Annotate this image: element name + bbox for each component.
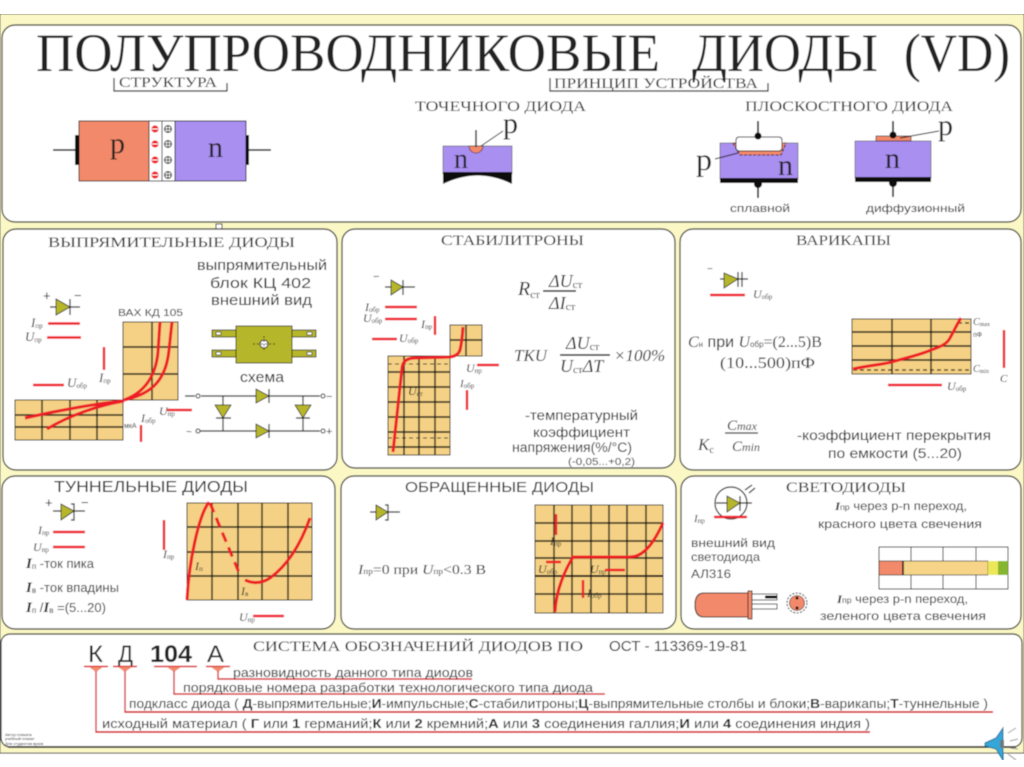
legend: forward current and voltage: I [31, 315, 35, 330]
chart: zener characteristic: ст [417, 390, 423, 398]
formula: temperature coefficient: ТКU [514, 346, 549, 365]
text: temperature coefficient description [512, 408, 638, 468]
formula: overlap coefficient: max [737, 419, 758, 433]
diagram: diffused diode: диффузионный [866, 203, 965, 215]
diagram: p-n structure: p [110, 127, 125, 160]
designation code [88, 641, 224, 668]
formula: temperature coefficient: ×100% [614, 346, 665, 365]
text: green glow [820, 592, 986, 623]
legend rows: разновидность данного типа диодов [233, 666, 473, 680]
formula: zener resistance: ΔI [549, 293, 566, 313]
legend: forward current and voltage [33, 523, 85, 554]
formula: overlap coefficient: с [709, 445, 714, 456]
icon: speaker [985, 728, 1018, 760]
legend: reverse current and voltage: пр [425, 323, 433, 331]
heading: ВЫПРЯМИТЕЛЬНЫЕ ДИОДЫ [48, 235, 295, 251]
text: overlap coefficient description: -коэффициент перекрытия [797, 428, 991, 443]
legend: forward current and voltage: пр [34, 336, 42, 344]
icon: diode symbol: + [43, 288, 51, 303]
diagram: p-n structure: n [208, 131, 223, 164]
chart: zener characteristic: U [408, 384, 417, 398]
text: peak and valley currents: п [32, 562, 36, 571]
chart: current-voltage curve KD105: U [159, 404, 168, 418]
chart: zener characteristic: пр [475, 367, 482, 375]
text: LED exterior caption [691, 536, 775, 581]
chart: backward diode characteristic: обр [547, 568, 558, 576]
heading: device principle: ПРИНЦИП УСТРОЙСТВА [554, 75, 758, 92]
connector lines [84, 666, 993, 732]
text: peak and valley currents: -ток пика [36, 556, 95, 571]
chart: tunnel diode characteristic: U [239, 610, 248, 624]
panel: zener diodes [342, 229, 675, 468]
formula: temperature coefficient: ст [590, 341, 599, 353]
formula: zener resistance: ΔU [549, 271, 573, 291]
small print: учебный плакат [5, 736, 35, 741]
diagram: diffused diode: n [885, 142, 900, 175]
icon: varicap symbol: обр [762, 293, 773, 301]
heading: СВЕТОДИОДЫ [786, 480, 906, 496]
text: red glow [818, 499, 982, 531]
chart: current-voltage curve KD105: ВАХ КД 105 [118, 308, 184, 319]
icon: LED symbol [693, 485, 755, 525]
text: peak and valley currents: / [36, 600, 44, 615]
text: rectifier block description: выпрямительный [197, 258, 327, 274]
designation code: А [207, 641, 224, 668]
legend: reverse current and voltage: I [365, 300, 369, 314]
diagram: diffused diode [855, 109, 965, 215]
text: peak and valley currents: -ток впадины [36, 580, 119, 595]
diagram: point-contact diode [415, 99, 586, 184]
legend: reverse current and voltage [363, 300, 435, 345]
chart: backward diode characteristic: I [550, 534, 554, 548]
icon: LED symbol: пр [698, 517, 705, 525]
chart: zener characteristic [388, 325, 499, 455]
diagram: point-contact diode: n [454, 144, 468, 175]
title: ДИОДЫ [692, 23, 878, 83]
chart: backward diode characteristic: U [538, 562, 547, 576]
formula: overlap coefficient: min [742, 440, 760, 454]
connector tab [216, 224, 222, 229]
panel: backward diodes [341, 476, 676, 629]
chart: backward diode characteristic [535, 505, 663, 613]
legend: forward current and voltage [25, 315, 81, 344]
formula: temperature coefficient: ΔT [582, 356, 605, 376]
chart: current-voltage curve KD105: пр [103, 377, 111, 385]
icon: varicap symbol: U [753, 287, 762, 301]
text: capacitance range: Cн при Uобр=(2...5)В [688, 334, 822, 351]
designation code: 104 [150, 641, 193, 668]
icon: tunnel diode symbol [45, 495, 89, 520]
chart: current-voltage curve KD105: обр [145, 417, 156, 425]
formula: temperature coefficient [514, 333, 665, 376]
formula: zener resistance [517, 271, 582, 313]
text: peak and valley currents: в [49, 606, 54, 615]
panel: light-emitting diodes [681, 476, 1021, 629]
diagram: p-n structure [53, 121, 271, 181]
chart: zener characteristic: U [466, 361, 475, 375]
icon: varicap symbol: − [707, 264, 713, 275]
chart: current-voltage curve KD105 [15, 308, 192, 442]
formula: zener resistance: R [518, 278, 530, 300]
text: peak and valley currents: в [32, 586, 36, 595]
heading: СТАБИЛИТРОНЫ [441, 233, 584, 249]
text: peak and valley currents: I [25, 600, 33, 616]
chart: tunnel diode characteristic: I [163, 547, 167, 561]
label: circuit: схема [240, 370, 285, 386]
chart: capacitance versus voltage: C [973, 364, 980, 375]
chart: backward diode characteristic: I [587, 586, 591, 600]
formula: overlap coefficient: C [727, 418, 737, 434]
circuit: diode bridge [185, 389, 332, 438]
legend: reverse current and voltage: обр [372, 317, 383, 325]
designation code: Д [118, 641, 133, 668]
text: rectifier block description: блок КЦ 402 [210, 276, 311, 292]
icon: LED symbol: I [694, 513, 698, 525]
diagram: LED bar scale [879, 547, 1008, 589]
text: green glow: Iпр через p-n переход, [836, 592, 968, 606]
chart: backward diode characteristic: пр [599, 568, 606, 576]
chart: capacitance versus voltage: обр [956, 385, 967, 393]
chart: capacitance versus voltage: пФ [973, 332, 982, 339]
chart: tunnel diode characteristic: в [245, 590, 249, 598]
text: overlap coefficient description [797, 428, 991, 461]
chart: zener characteristic: обр [464, 382, 475, 390]
heading [253, 638, 747, 655]
text: temperature coefficient description: напряжения(%/°C) [512, 440, 632, 455]
chart: backward diode characteristic: обр [591, 592, 602, 600]
legend: reverse current and voltage: U [399, 331, 408, 345]
heading: ТУННЕЛЬНЫЕ ДИОДЫ [54, 479, 248, 496]
text: rectifier block description: внешний вид [211, 293, 313, 309]
legend rows: исходный материал ( Г или 1 германий; К или 2 кремний; А или 3 соединения галлия; И или 4 соединения индия ) [102, 717, 870, 731]
legend: reverse current and voltage: обр [369, 306, 380, 314]
text: forward current condition: Iпр=0 при Uпр<0.3 В [357, 562, 486, 577]
text: peak and valley currents: =(5...20) [54, 600, 106, 615]
title: (VD) [904, 23, 1010, 83]
chart: capacitance versus voltage: U [947, 379, 956, 393]
diagram: diffused diode: p [938, 109, 953, 142]
text: LED exterior caption: светодиода [691, 550, 760, 564]
diagram: alloyed diode [696, 121, 798, 215]
panel: tunnel diodes [2, 476, 335, 629]
chart: zener characteristic: I [460, 378, 464, 390]
chart: capacitance versus voltage [852, 317, 1008, 393]
icon: tunnel diode symbol: + [45, 495, 53, 510]
legend: forward current and voltage: U [33, 540, 42, 554]
text: peak and valley currents: I [25, 580, 33, 596]
chart: tunnel diode characteristic: пр [248, 616, 255, 624]
icon: tunnel diode symbol: − [81, 495, 89, 510]
formula: overlap coefficient: K [698, 435, 709, 454]
icon: varicap symbol [707, 264, 773, 301]
chart: tunnel diode characteristic: пр [167, 553, 175, 561]
circuit: diode bridge: ~ [186, 427, 192, 438]
legend: forward current and voltage: I [38, 523, 42, 537]
legend: forward current and voltage: пр [42, 546, 49, 554]
text: temperature coefficient description: -температурный [525, 408, 638, 423]
heading: СИСТЕМА ОБОЗНАЧЕНИЙ ДИОДОВ ПО [253, 638, 583, 655]
diagram: alloyed diode: p [696, 141, 712, 177]
chart: current-voltage curve KD105: I [141, 411, 145, 425]
text: peak and valley currents: I [25, 556, 33, 572]
text: overlap coefficient description: по емкости (5...20) [828, 446, 962, 461]
chart: capacitance versus voltage: max [980, 322, 990, 328]
icon: backward diode symbol [370, 505, 400, 520]
legend: reverse current and voltage: обр [408, 337, 419, 345]
chart: capacitance versus voltage: C [973, 317, 980, 328]
icon: diode symbol [43, 288, 82, 315]
circuit: diode bridge: − [326, 391, 332, 403]
chart: current-voltage curve KD105: U [67, 375, 76, 390]
heading: planar diode: ПЛОСКОСТНОГО ДИОДА [745, 99, 953, 115]
small print: Автор плаката [5, 732, 33, 737]
formula: overlap coefficient: C [732, 439, 742, 455]
diagram: point-contact diode: ТОЧЕЧНОГО ДИОДА [415, 99, 586, 115]
text: green glow: зеленого цвета свечения [820, 609, 986, 623]
title [36, 23, 1010, 83]
heading: structure: СТРУКТУРА [119, 75, 217, 91]
legend: reverse current and voltage: U [363, 311, 372, 325]
text: LED exterior caption: внешний вид [691, 536, 775, 550]
heading: ОСТ - 113369-19-81 [609, 638, 747, 655]
title: ПОЛУПРОВОДНИКОВЫЕ [36, 23, 660, 83]
panel: header [2, 23, 1021, 222]
diagram: alloyed diode: n [778, 149, 793, 182]
chart: capacitance versus voltage: C [1000, 373, 1008, 385]
text: rectifier block description [197, 258, 327, 309]
diagram: alloyed diode: сплавной [730, 203, 790, 215]
legend rows: подкласс диода ( Д-выпрямительные; И-импульсные; С-стабилитроны; Ц-выпрямительные столбы и блоки; В-варикапы; Т-туннельные ) [129, 697, 988, 711]
chart: current-voltage curve KD105: пр [168, 410, 175, 418]
legend: forward current and voltage: пр [42, 529, 50, 537]
formula: temperature coefficient: ΔU [566, 333, 590, 353]
circuit: diode bridge: + [326, 426, 332, 438]
diagram: point-contact diode: p [503, 107, 518, 140]
panel: rectifier diodes [3, 229, 337, 470]
icon: zener symbol [373, 271, 415, 295]
legend rows [102, 666, 988, 731]
chart: current-voltage curve KD105: мкА [124, 423, 137, 430]
icon: LED exterior [695, 591, 807, 619]
formula: overlap coefficient [697, 418, 760, 456]
chart: tunnel diode characteristic: I [195, 559, 199, 573]
legend: reverse current and voltage: I [421, 317, 425, 331]
formula: zener resistance: ст [530, 289, 540, 301]
chart: backward diode characteristic: U [590, 562, 599, 576]
text: peak and valley currents [25, 556, 119, 616]
heading: ОБРАЩЕННЫЕ ДИОДЫ [405, 480, 594, 496]
chart: backward diode characteristic: пр [554, 540, 562, 548]
formula: temperature coefficient: U [560, 356, 573, 376]
panel: varicaps [680, 229, 1021, 470]
icon: zener symbol: − [373, 271, 379, 283]
small print: Для студентов вузов [5, 741, 43, 746]
panel: designation system [1, 634, 1022, 747]
text: capacitance range [688, 334, 822, 372]
chart: tunnel diode characteristic: I [241, 584, 245, 598]
legend: forward current and voltage: пр [35, 322, 43, 330]
text: temperature coefficient description: коэффициент [533, 425, 630, 440]
text: red glow: красного цвета свечения [818, 517, 982, 531]
legend: forward current and voltage: U [25, 329, 34, 344]
heading: ВАРИКАПЫ [796, 233, 891, 249]
text: peak and valley currents: I [42, 600, 50, 616]
chart: current-voltage curve KD105: I [99, 370, 103, 385]
text: peak and valley currents: п [32, 606, 36, 615]
formula: temperature coefficient: ст [573, 364, 583, 376]
formula: zener resistance: ст [566, 301, 575, 313]
text: capacitance range: (10...500)пФ [720, 355, 815, 372]
chart: current-voltage curve KD105: обр [76, 382, 87, 390]
small print [5, 732, 43, 746]
chart: tunnel diode characteristic: п [199, 565, 203, 573]
designation code: К [88, 641, 103, 668]
text: LED exterior caption: АЛ316 [691, 567, 731, 581]
chart: capacitance versus voltage: min [980, 369, 989, 375]
icon: rectifier block exterior [212, 326, 316, 363]
formula: zener resistance: ст [573, 279, 582, 291]
icon: diode symbol: − [74, 288, 82, 303]
legend rows: порядковые номера разработки технологического типа диода [183, 681, 593, 695]
text: temperature coefficient description: (-0,05...+0,2) [568, 457, 635, 468]
text: red glow: Iпр через p-n переход, [834, 499, 967, 513]
chart: tunnel diode characteristic [162, 502, 312, 624]
